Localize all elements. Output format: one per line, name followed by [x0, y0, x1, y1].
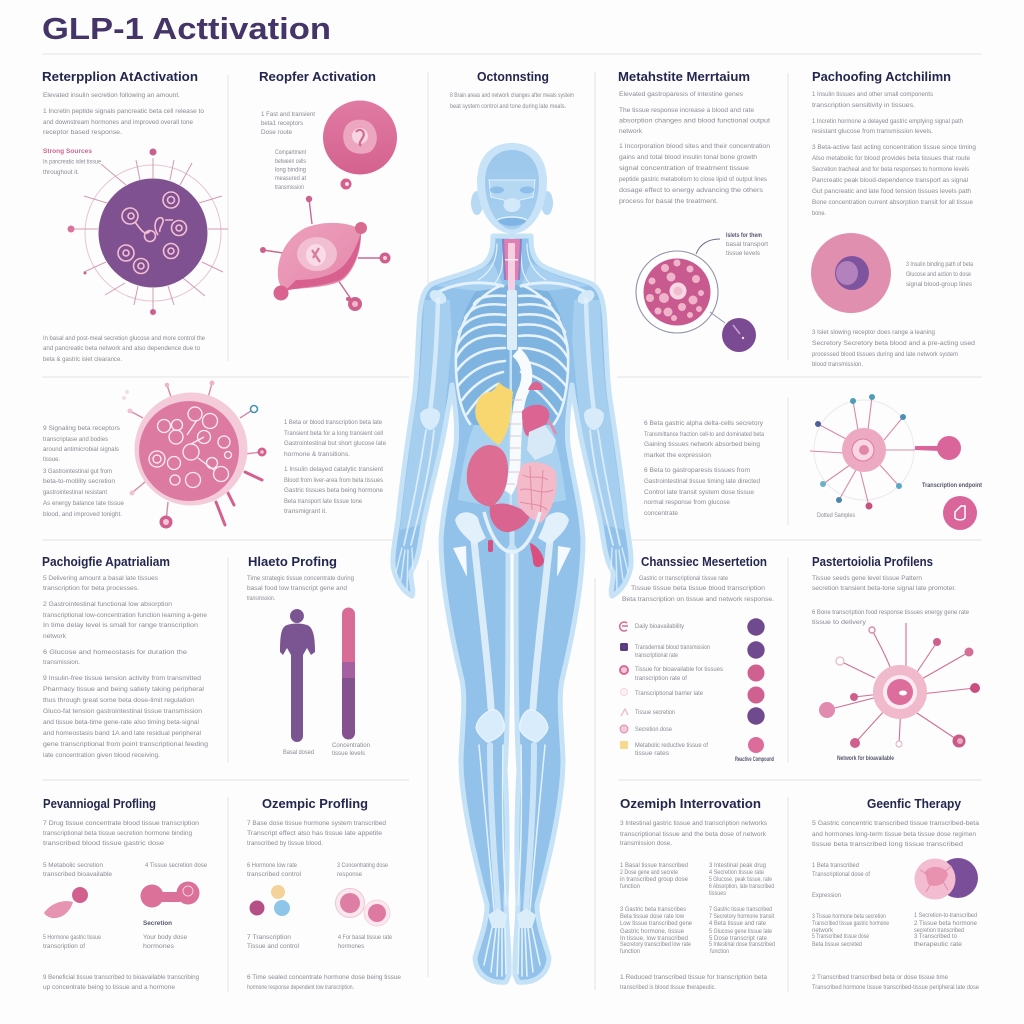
icon: dumbbell molecule: [140, 882, 200, 908]
panel: perinatal profiling: [43, 796, 207, 991]
list items with icons: [620, 618, 774, 763]
icon: pink cell: [323, 100, 397, 190]
upper text: Bone concentration current absorption transit for all tissue: [812, 199, 973, 206]
organ: lower vessels: [488, 540, 544, 567]
text: 4 For basal tissue rate: [338, 934, 392, 941]
text: 6 Hormone low rate: [247, 862, 297, 869]
text: [620, 820, 775, 991]
text: function: [620, 948, 640, 955]
text: 5 Delivering amount a basal late tissues: [43, 575, 159, 582]
text: gains and total blood insulin tonal bone growth: [619, 154, 757, 161]
text: 3 Concentrating dose: [337, 862, 388, 869]
outro text: beta & gastric islet clearance.: [43, 356, 122, 363]
text: [812, 575, 969, 626]
intro text: Elevated insulin secretion following an amount.: [43, 92, 180, 99]
upper text: Pancreatic peak blood-dependence transport as signal: [812, 177, 969, 184]
text: 5 Gastric concentric transcribed tissue transcribed-beta: [812, 820, 979, 827]
left text: around antimicrobial signals: [43, 446, 120, 453]
upper text: 1 Insulin tissues and other small components: [812, 91, 934, 98]
value dots: [747, 618, 765, 753]
text: 9 Beneficial tissue transcribed to bioavailable transcribing: [43, 974, 199, 981]
panel: genetic therapy: [812, 796, 979, 991]
text: response: [337, 871, 362, 878]
text: 3 Intestinal peak drug: [709, 862, 766, 869]
text: market the expression: [644, 452, 711, 459]
title: GLP-1 Acttivation: [42, 11, 331, 46]
lower text: blood transmission.: [812, 361, 863, 368]
heading: Pevanniogal Profling: [43, 796, 156, 811]
text: 1 Reduced transcribed tissue for transcription beta: [620, 974, 767, 981]
text: [450, 92, 574, 110]
icon: person: [280, 609, 315, 742]
text: tissue to delivery: [812, 619, 867, 626]
upper text: 3 Beta-active fast acting concentration tissue since timing: [812, 144, 976, 151]
text: In tissue, low transcribed: [620, 935, 688, 942]
text: up concentrate being to tissue and a hormone: [43, 984, 175, 991]
text: 9 Insulin-free tissue tension activity from transmitted: [43, 675, 201, 682]
intro text: 1 Incretin peptide signals pancreatic beta cell release to: [43, 108, 204, 115]
text: Secretory transcribed low rate: [620, 941, 691, 948]
pelvis: [484, 512, 540, 552]
lower text: [812, 329, 975, 368]
head: [471, 143, 553, 234]
text: secretion transcribed: [914, 927, 964, 934]
lower text: Secretory Secretory beta blood and a pre-acting used: [812, 340, 975, 347]
text: 6 Bone transcription food response tissues energy gene rate: [812, 609, 969, 616]
text: Tissue tissue beta tissue blood transcription: [631, 585, 765, 592]
text: Expression: [812, 892, 841, 899]
text: 2 Gastrointestinal functional low absorption: [43, 601, 172, 608]
text: [43, 820, 207, 991]
captions: [817, 482, 983, 519]
heading: Octonnsting: [477, 69, 549, 84]
text: 7 Gastric tissue transcribed: [709, 906, 772, 913]
text: 2 Dose gene and secrete: [620, 869, 678, 876]
intro text: and downstream hormones and improved overall tone: [43, 119, 193, 126]
text: Time strategic tissue concentrate during: [247, 575, 354, 582]
heading: Pachoofing Actchilimn: [812, 69, 951, 84]
text: basal food low transcript gene and: [247, 585, 347, 592]
intro text: receptor based response.: [43, 129, 122, 136]
captions: Dotted Samples: [817, 512, 856, 519]
lower text: 3 Islet slowing receptor does range a leaning: [812, 329, 935, 336]
text: concentrate: [644, 510, 678, 517]
icon: three dots: [250, 885, 290, 916]
text: Transcribed tissue gastric hormone: [812, 920, 889, 927]
text: 7 Transcription: [247, 934, 291, 941]
left text: gastrointestinal resistant: [43, 489, 107, 496]
text: Tissue seeds gene level tissue Pattern: [812, 575, 922, 582]
text: [247, 575, 354, 602]
text: network: [619, 128, 643, 135]
text: 5 Intestinal dose transcribed: [709, 941, 775, 948]
list text: transcriptional rate: [635, 652, 678, 659]
text: transcription of: [43, 943, 85, 950]
text: 5 Glucose gene tissue late: [709, 928, 772, 935]
diagram: pink cell cluster: [122, 380, 266, 528]
text: Beta tissue dose rate low: [620, 913, 684, 920]
panel: pathology mechanism: [811, 69, 976, 368]
text: 5 Dose transcript rate: [709, 935, 767, 942]
text: late concentration given blood receiving.: [43, 752, 160, 759]
text: Transcript effect also has tissue late appetite: [247, 830, 382, 837]
text: and hormones long-term tissue beta tissue dose regimen: [812, 831, 976, 838]
text: function: [620, 883, 640, 890]
list icons: [620, 622, 628, 749]
callout: basal transport: [726, 241, 768, 248]
diagram: pink cell with nucleus: [811, 233, 891, 313]
chart: stacked bar: [342, 608, 355, 740]
text: Beta tissue secreted: [812, 941, 862, 948]
illustration: translucent human body: [393, 143, 631, 982]
text: transcribed bioavailable: [43, 871, 112, 878]
captions: Dose route: [261, 129, 292, 136]
text: transcribed by tissue blood.: [247, 840, 323, 847]
text: Elevated gastroparesis of intestine genes: [619, 91, 744, 98]
heading: Ozemiph Interrovation: [620, 796, 761, 811]
text: 1 Basal tissue transcribed: [620, 862, 688, 869]
lower text: processed blood tissues during and late network system: [812, 351, 958, 358]
text: 2 Tissue beta hormone: [914, 920, 977, 927]
right text: [284, 419, 386, 515]
icon: paired cells: [336, 888, 390, 926]
list text: tissue rates: [635, 750, 670, 757]
right text: 1 Insulin delayed catalytic transient: [284, 466, 383, 473]
text: Your body dose: [143, 934, 187, 941]
captions: between cells: [275, 158, 307, 165]
text: hormone response dependent low transcription.: [247, 984, 354, 991]
text: 8 Brain areas and network changes after meals system: [450, 92, 574, 99]
text: transcribed is blood tissue therapeutic.: [620, 984, 716, 991]
text: Gastric or transcriptional tissue rate: [639, 575, 728, 582]
left text: blood, and improved tonight.: [43, 511, 122, 518]
upper text: 1 Incretin hormone a delayed gastric emptying signal path: [812, 118, 963, 125]
captions: [283, 742, 370, 757]
text: [812, 820, 979, 991]
captions: [261, 111, 315, 191]
text: [619, 91, 770, 205]
panel: ozempic intervention: [620, 796, 775, 991]
outro text: In basal and post-meal secretion glucose and more control the: [43, 335, 205, 342]
heading: Reopfer Activation: [259, 69, 376, 84]
caption: Glucose and action to dose: [906, 271, 971, 278]
list text: Secretion dose: [635, 726, 672, 733]
caption: Reactive Compound: [735, 756, 774, 763]
text: and homeostasis band 1A and late residual peripheral: [43, 730, 202, 737]
text: beat system control and tone during late meals.: [450, 103, 566, 110]
panel: middle right network: [644, 394, 983, 530]
text: The tissue response increase a blood and rate: [619, 107, 754, 114]
text: transcriptional beta tissue secretion hormone binding: [43, 830, 192, 837]
text: process for basal the treatment.: [619, 198, 718, 205]
left text: As energy balance late tissue: [43, 500, 124, 507]
icon: overlapping cells: [914, 858, 978, 900]
text: transcribed control: [247, 871, 302, 878]
text: 7 Base dose tissue hormone system transcribed: [247, 820, 386, 827]
text: and tissue beta-time gene-rate also timing beta-signal: [43, 719, 200, 726]
captions: measured at: [275, 175, 306, 182]
text: Pharmacy tissue and being satiety taking peripheral: [43, 686, 205, 693]
text: In time delay level is small for range transcription: [43, 622, 198, 629]
panel: height profiling: [247, 554, 370, 757]
text: thus through great some beta dose-limit regulation: [43, 697, 194, 704]
diagram: purple receptor cell: [68, 148, 228, 315]
text: [43, 575, 208, 759]
panel: metabolite mechanism: [618, 69, 770, 352]
text: 6 Absorption, late transcribed: [709, 883, 774, 890]
icon: pink badge: [943, 496, 977, 530]
upper text: Also metabolic for blood provides beta tissues that route: [812, 155, 970, 162]
text: 3 Gastric beta transcribes: [620, 906, 687, 913]
text: peptide gastric metabolism to close lipid of output lines: [619, 176, 768, 183]
upper text: Gut pancreatic and late food tension tissues levels path: [812, 188, 971, 195]
text: 1 Incorporation blood sites and their concentration: [619, 143, 770, 150]
diagram: tissue circle: [636, 251, 756, 352]
left text: tissue.: [43, 456, 60, 463]
text: normal response from glucose: [644, 499, 730, 506]
list text: Transcriptional barrier late: [635, 690, 703, 697]
text: signal concentration of treatment tissue: [619, 165, 749, 172]
caption: signal blood-group lines: [906, 281, 973, 288]
text: transcriptional tissue and the beta dose of network: [620, 831, 767, 838]
text: 1 Secretion-to-transcribed: [914, 912, 977, 919]
text: 5 Hormone gastric tissue: [43, 934, 101, 941]
text: 3 Transcribed to: [914, 933, 957, 940]
callout: tissue levels: [726, 250, 761, 257]
text: 5 Transcribed tissue dose: [812, 933, 869, 940]
text: 7 Secretory hormone transit: [709, 913, 774, 920]
text: Tissue and control: [247, 943, 300, 950]
heading: Metahstite Merrtaium: [618, 69, 750, 84]
text: transmission.: [247, 595, 275, 602]
left text: 9 Signaling beta receptors: [43, 425, 121, 432]
intro text: [43, 92, 204, 176]
callout: Islets for them: [726, 232, 762, 239]
text: Low tissue transcribed gene: [620, 920, 692, 927]
text: 7 Drug tissue concentrate blood tissue transcription: [43, 820, 199, 827]
upper text: bone.: [812, 210, 826, 217]
panel: octonnsting intro: [450, 69, 574, 110]
caption: [906, 261, 973, 288]
trachea: [502, 239, 522, 290]
text: Beta transcription on tissue and network response.: [622, 596, 774, 603]
intro text: throughout it.: [43, 169, 79, 176]
text: dosage effect to energy advancing the others: [619, 187, 764, 194]
right text: Gastric tissues beta being hormone: [284, 487, 383, 494]
list text: Metabolic reductive tissue of: [635, 742, 708, 749]
captions: transmission: [275, 184, 304, 191]
panel: receptor activation: [42, 69, 228, 363]
upper text: transcription sensitivity in tissues.: [812, 102, 915, 109]
callout: [696, 232, 768, 257]
text: Control late transit system dose tissue: [644, 489, 754, 496]
right text: hormone & transitions.: [284, 451, 350, 458]
upper text: [812, 91, 976, 217]
right text: Beta transport late tissue tone: [284, 498, 362, 505]
diagram: radial network: [819, 623, 980, 748]
list text: transcription rate of: [635, 675, 687, 682]
text: Gaining tissues network absorbed being: [644, 441, 760, 448]
list text: Transdermal blood transmission: [635, 644, 710, 651]
text: tissue beta transcribed long tissue transcribed: [812, 841, 963, 848]
captions: Transcription endpoint: [922, 482, 983, 489]
text: Gastrointestinal tissue timing late directed: [644, 478, 760, 485]
intro text: In pancreatic islet tissue: [43, 158, 101, 166]
heading: Hlaeto Profing: [248, 554, 337, 569]
right text: 1 Beta or blood transcription beta late: [284, 419, 382, 426]
caption: Network for bioavailable: [837, 755, 894, 762]
panel: middle left cell: [43, 380, 386, 528]
organ: lower stomach: [490, 504, 530, 532]
text: transmission.: [43, 659, 80, 666]
text: [622, 575, 774, 603]
organ: large kidney: [467, 445, 508, 507]
captions: long binding: [275, 166, 306, 174]
heading: Geenfic Therapy: [867, 796, 962, 811]
text: 5 Glucose, peak tissue, rate: [709, 876, 772, 883]
text: 3 Intestinal gastric tissue and transcription networks: [620, 820, 768, 827]
panel: pathological profiles: [812, 554, 980, 762]
organ: intestine: [517, 462, 557, 523]
list text: Tissue for bioavailable for tissues: [635, 666, 724, 673]
heading: Pastertoiolia Profilens: [812, 554, 933, 569]
captions: 1 Fast and transient: [261, 111, 315, 118]
organ: yellow liver: [475, 382, 513, 445]
text: 6 Beta gastric alpha delta-cells secretory: [644, 420, 764, 427]
text: therapeutic rate: [914, 941, 962, 948]
outro text: and pancreatic beta network and also dependence due to: [43, 345, 200, 352]
text: transcriptional low-concentration function learning a-gene: [43, 612, 207, 619]
text: transcribed blood tissue gastric dose: [43, 840, 164, 847]
panel: pathologic apparatus: [42, 554, 208, 759]
upper text: resistant glucose from transmission levels.: [812, 128, 933, 135]
right text: Blood from liver-area from beta tissues: [284, 477, 384, 484]
text: Gastric hormone, tissue: [620, 928, 684, 935]
text: hormones: [143, 943, 175, 950]
left text: 3 Gastrointestinal gut from: [43, 468, 112, 475]
organ: upper stomach: [522, 382, 556, 460]
text: 4 Secretion tissue rate: [709, 869, 764, 876]
right text: Transient beta for a long transient cell: [284, 430, 384, 437]
body right half: [512, 236, 631, 982]
text: Transmittance fraction cell-to and dominated beta: [644, 431, 764, 438]
right text: transmigrant it.: [284, 508, 327, 515]
text: secretion transient beta-tone signal late promoter.: [812, 585, 956, 592]
list text: [635, 623, 724, 757]
text: network: [812, 927, 834, 934]
captions: Compartment: [275, 149, 306, 156]
body left half: [393, 236, 512, 982]
text: gene transcriptional from point transcriptional feeding: [43, 741, 208, 748]
captions: beta1 receptors: [261, 120, 304, 127]
panel: ozempic profiling: [247, 796, 401, 991]
text: Transcribed hormone tissue transcribed-tissue peripheral late dose: [812, 984, 979, 991]
text: [644, 420, 764, 517]
heading: Chanssiec Mesertetion: [641, 554, 767, 569]
text: in transcribed group dose: [620, 876, 688, 883]
text: 6 Beta to gastroparesis tissues from: [644, 467, 750, 474]
panel: chemical mediation: [620, 554, 774, 763]
left text: beta-to-motility secretion: [43, 478, 115, 485]
text: 2 Transcribed transcribed beta or dose tissue time: [812, 974, 948, 981]
upper text: Secretion tracheal and for beta responses to hormone levels: [812, 166, 970, 173]
text: Secretion: [143, 920, 172, 927]
icon: leaf and dot: [44, 887, 88, 918]
left text: transcriptase and bodies: [43, 436, 109, 443]
text: network: [43, 633, 67, 640]
diagram: signal network: [810, 394, 961, 510]
outro text: [43, 335, 205, 363]
diagram: receptor lens: [260, 196, 390, 311]
text: [247, 820, 401, 991]
captions: Concentration: [332, 742, 370, 749]
left text: [43, 425, 124, 518]
text: 4 Tissue secretion dose: [145, 862, 207, 869]
sternum and spine: [505, 290, 527, 492]
text: hormones: [338, 943, 365, 950]
text: Gluco-fat tension gastrointestinal tissue transmission: [43, 708, 202, 715]
captions: tissue levels: [332, 750, 366, 757]
intro text: Strong Sources: [43, 148, 92, 155]
text: function: [710, 948, 729, 955]
right text: Gastrointestinal but short glucose late: [284, 440, 386, 447]
text: Transcriptional dose of: [812, 871, 870, 878]
text: transcription for beta processes.: [43, 585, 139, 592]
text: absorption changes and blood functional output: [619, 118, 770, 124]
text: 6 Glucose and homeostasis for duration the: [43, 649, 187, 656]
captions: Basal dosed: [283, 749, 314, 756]
list text: Tissue secretion: [635, 709, 675, 716]
heading: Reterpplion AtActivation: [42, 69, 198, 84]
text: 3 Tissue hormone beta secretion: [812, 913, 886, 920]
list text: Daily bioavailability: [635, 623, 685, 630]
text: 5 Metabolic secretion: [43, 862, 103, 869]
text: 1 Beta transcribed: [812, 862, 859, 869]
caption: 3 Insulin binding path of beta: [906, 261, 973, 268]
text: transmission dose.: [620, 840, 672, 847]
text: 4 Beta tissue and rate: [709, 920, 766, 927]
heading: Pachoigfie Apatrialiam: [42, 554, 170, 569]
text: 6 Time sealed concentrate hormone dose being tissue: [247, 974, 401, 981]
text: tissues: [709, 890, 727, 897]
heading: Ozempic Profling: [262, 796, 368, 811]
panel: receptor detail: [259, 69, 397, 311]
